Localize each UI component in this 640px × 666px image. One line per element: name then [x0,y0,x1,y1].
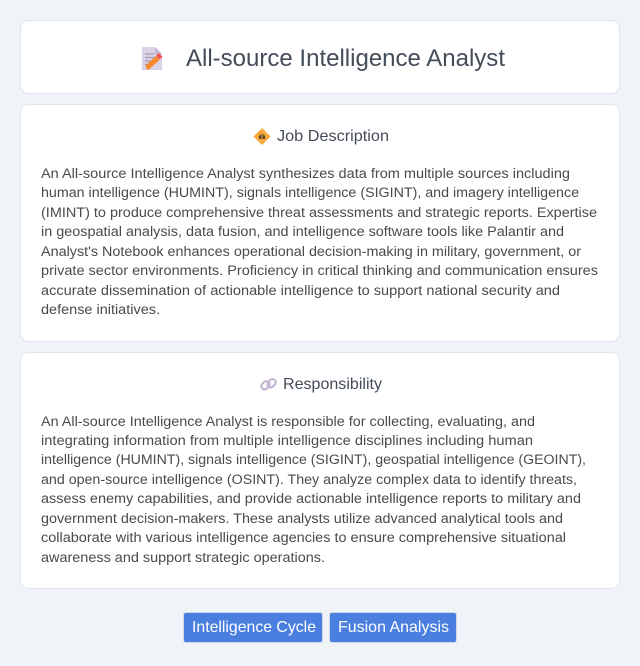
text block: responsibility: An All-source Intelligence Analyst is responsible for collecting, evaluating, and [41,414,535,430]
button: Fusion Analysis [330,612,456,642]
text block: job description: accurate dissemination of actionable intelligence to support national security and [41,283,560,299]
text block: job description [41,166,598,318]
panel: responsibility [20,352,620,588]
text block: job description: defense initiatives. [41,302,160,318]
button: Fusion Analysis: Fusion Analysis [338,619,449,636]
text block: responsibility: integrating information from multiple intelligence disciplines including human [41,433,533,449]
text block: job description: private sector environments. Proficiency in critical thinking and communication ensures [41,263,598,279]
heading: job description: Job Description [277,128,389,145]
text block: job description: human intelligence (HUMINT), signals intelligence (SIGINT), and imagery intelligence [41,185,579,201]
icon: orange diamond sign [254,129,270,144]
text block: responsibility: collaborate with various intelligence agencies to ensure comprehensive situational [41,530,566,546]
text block: job description: (IMINT) to produce comprehensive threat assessments and strategic reports. Expertise [41,205,597,221]
panel: job description [20,104,620,342]
title: All-source Intelligence Analyst [186,45,505,72]
text block: responsibility [41,414,586,566]
text block: job description: in geospatial analysis, data fusion, and intelligence software tools like Palantir and [41,224,564,240]
text block: responsibility: intelligence (HUMINT), signals intelligence (SIGINT), geospatial intelligence (GEOINT), [41,452,586,468]
text block: job description: An All-source Intelligence Analyst synthesizes data from multiple sources including [41,166,570,182]
icon: chain link [260,378,277,391]
text block: job description: Analyst's Notebook enhances operational decision-making in military, government, or [41,244,581,260]
text block: responsibility: awareness and support strategic operations. [41,550,325,566]
button: Intelligence Cycle: Intelligence Cycle [192,619,316,636]
text block: responsibility: government decision-makers. These analysts utilize advanced analytical tools and [41,511,563,527]
panel: title card [20,20,620,94]
icon: memo with pencil [142,47,162,70]
text block: responsibility: and open-source intelligence (OSINT). They analyze complex data to identify threats, [41,472,577,488]
heading: responsibility: Responsibility [283,376,382,393]
text block: responsibility: assess enemy capabilities, and provide actionable intelligence reports to military and [41,491,581,507]
button: Intelligence Cycle [184,612,322,642]
